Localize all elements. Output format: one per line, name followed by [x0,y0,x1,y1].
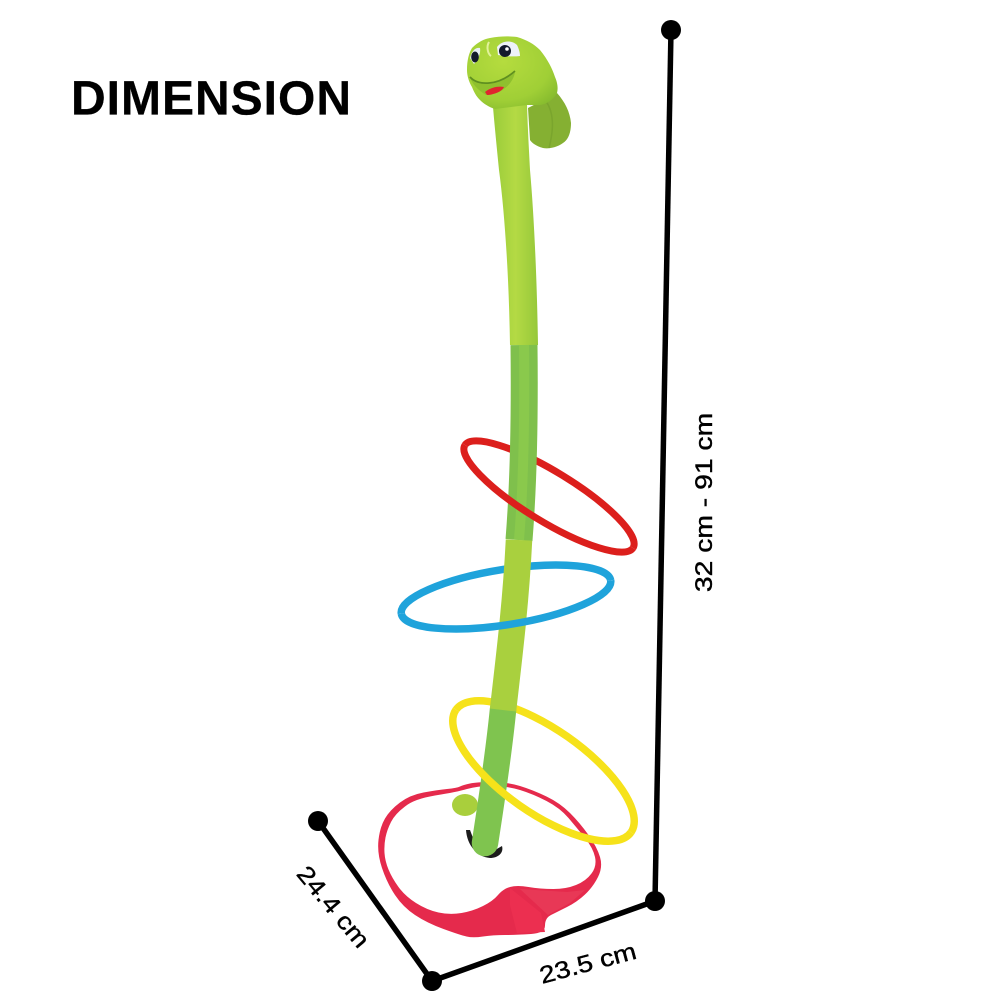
yellow ring back [456,701,634,832]
smile [470,71,515,83]
tail [528,93,571,148]
dimension lines [308,20,681,991]
base outer rim [378,782,601,937]
height label: 32 cm - 91 cm [690,413,717,592]
eye left white [470,48,480,64]
endpoint right [645,891,665,911]
endpoint left [308,811,328,831]
pole base [485,710,503,843]
endpoint bottom [422,971,442,991]
head [467,36,558,109]
mouth shadow [470,72,515,95]
eye glint [505,47,509,51]
title: DIMENSION [71,72,352,126]
width line [432,901,655,981]
base inner [384,786,596,914]
base handle facet [510,888,545,933]
apple base [378,782,601,937]
pole upper [493,104,538,345]
mouth [485,87,504,95]
leaf [452,794,478,816]
ring fronts [401,445,633,841]
width label: 23.5 cm [536,937,639,989]
caterpillar body [467,36,571,843]
pole mid [519,345,524,540]
pole mid highlight [519,345,524,540]
eye right white [497,41,520,56]
endpoint top [661,20,681,40]
red ring front [464,445,633,552]
depth label: 24.4 cm [291,861,374,953]
eye left pupil [471,52,479,62]
eye right pupil [499,45,511,57]
blue ring back [401,565,611,614]
ring backs [401,441,634,832]
pole hole [466,830,502,858]
height line [655,30,671,901]
blue ring front [401,580,611,629]
head highlight [488,42,491,56]
pole lower [503,540,519,710]
yellow ring front [453,710,631,841]
depth line [318,821,432,981]
base right highlight [520,889,585,915]
tail band [545,100,552,148]
red ring back [465,441,634,548]
